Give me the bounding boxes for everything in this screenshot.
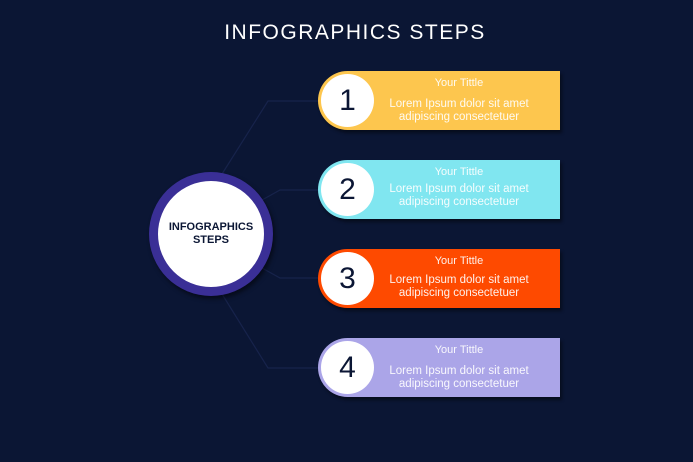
card 1: Lorem Ipsum dolor sit amet [389, 98, 529, 110]
central circle [149, 172, 273, 296]
card 4: Lorem Ipsum dolor sit amet [389, 365, 529, 377]
card 2: 2 [339, 173, 356, 206]
card 3 [318, 249, 560, 308]
card 3: 3 [339, 262, 356, 295]
card 4 [318, 338, 560, 397]
card 4: adipiscing consectetuer [399, 378, 519, 390]
card 4: 4 [339, 351, 356, 384]
card 3: adipiscing consectetuer [399, 287, 519, 299]
card 1 [318, 71, 560, 130]
card 1: Your Tittle [435, 77, 483, 89]
card 1: 1 [339, 84, 356, 117]
central circle: INFOGRAPHICS [169, 221, 253, 233]
card 1: adipiscing consectetuer [399, 111, 519, 123]
central circle: STEPS [193, 234, 229, 246]
card 3: Lorem Ipsum dolor sit amet [389, 274, 529, 286]
card 3: Your Tittle [435, 255, 483, 267]
card 2: Lorem Ipsum dolor sit amet [389, 183, 529, 195]
title: INFOGRAPHICS STEPS [224, 21, 486, 44]
card 2: Your Tittle [435, 166, 483, 178]
card 4: Your Tittle [435, 344, 483, 356]
card 2: adipiscing consectetuer [399, 196, 519, 208]
card 2 [318, 160, 560, 219]
